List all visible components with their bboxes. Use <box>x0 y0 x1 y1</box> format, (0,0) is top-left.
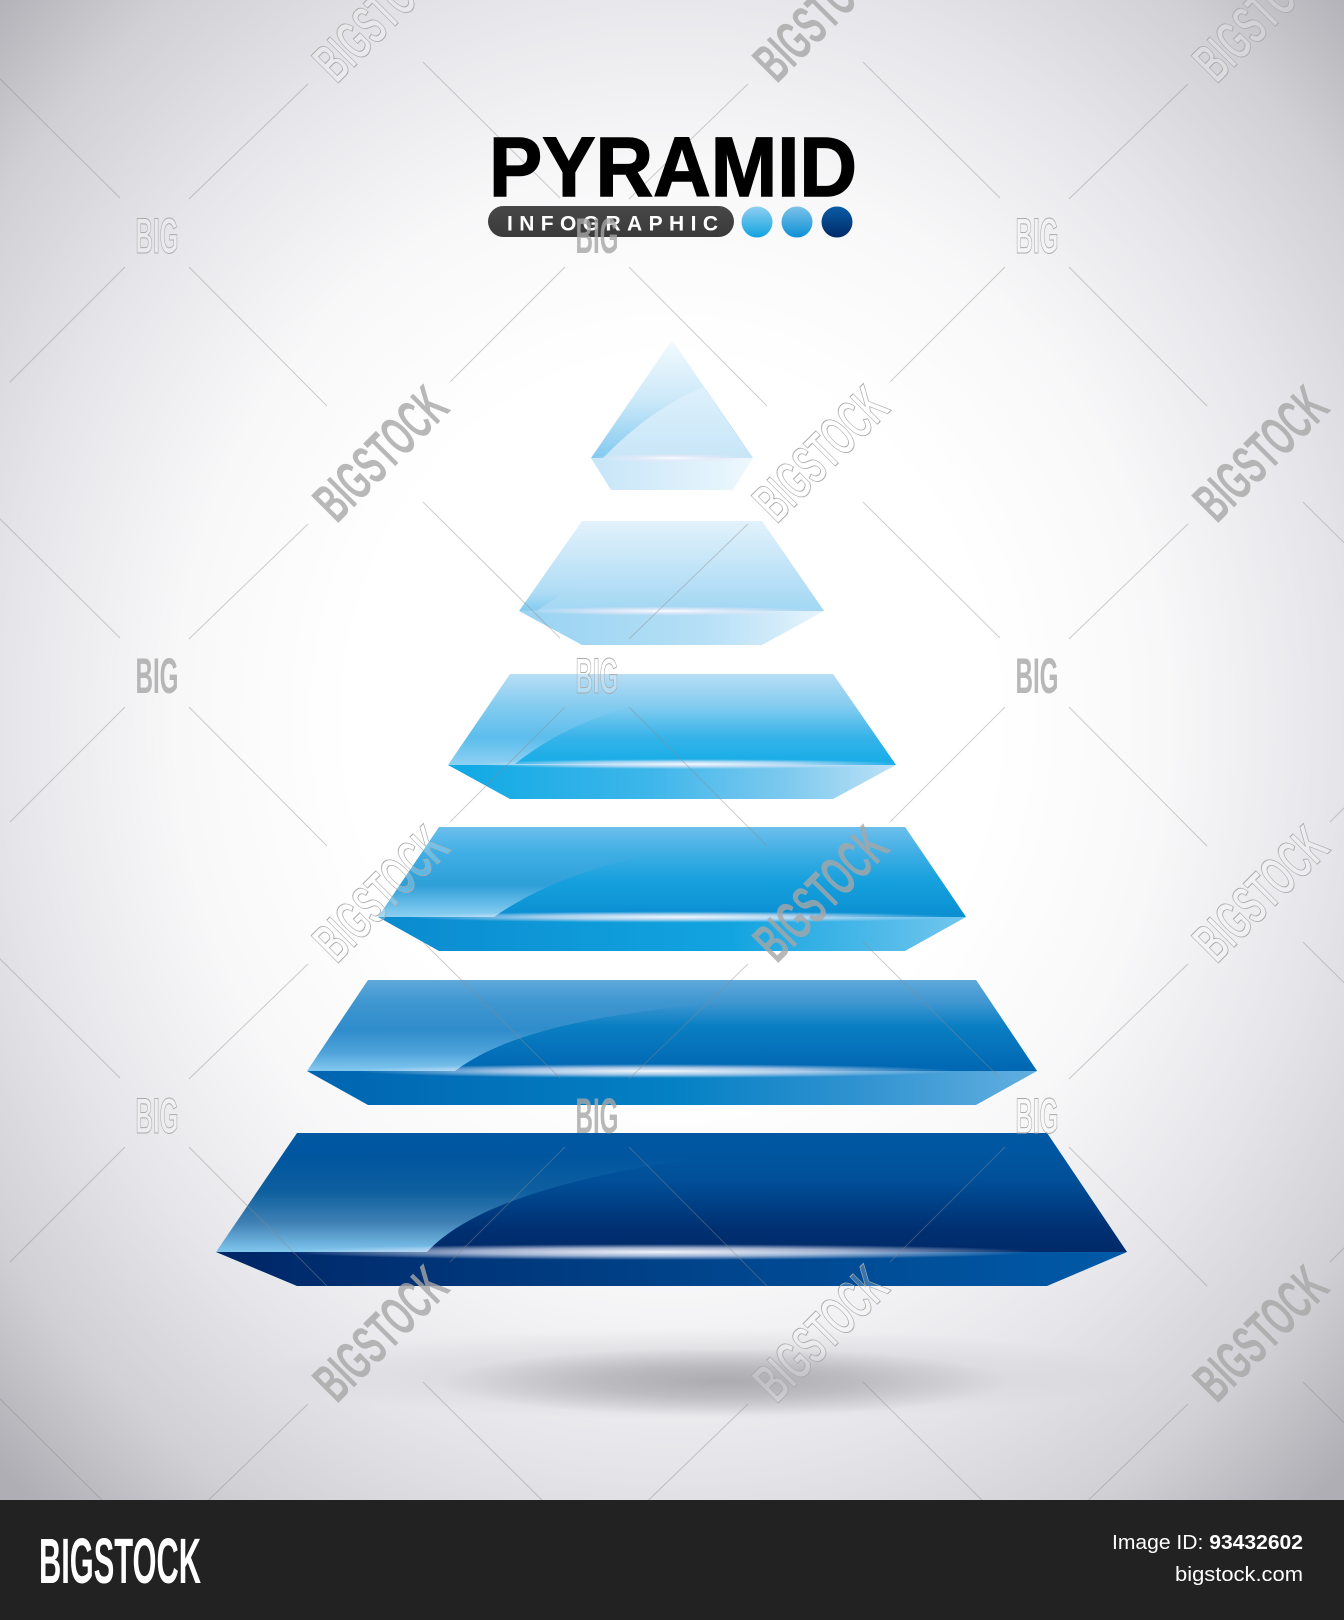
tier 4 <box>378 827 966 951</box>
watermark text: BIG <box>576 648 618 704</box>
watermark text: BIG <box>136 648 178 704</box>
watermark text: BIGSTOCK <box>741 814 900 973</box>
watermark text: BIGSTOCK <box>301 374 460 533</box>
tier 5 <box>307 980 1037 1105</box>
watermark text: BIGSTOCK <box>741 374 900 533</box>
watermark text: BIG <box>1016 208 1058 264</box>
watermark text: BIG <box>1016 1088 1058 1144</box>
floor shadow <box>265 1328 1145 1420</box>
watermark text: BIGSTOCK <box>741 1254 900 1413</box>
subtitle pill <box>488 206 734 237</box>
watermark text: BIG <box>136 1088 178 1144</box>
tier 2 <box>518 521 824 645</box>
tier 6: base <box>216 1133 1127 1286</box>
footer bar <box>0 1500 1344 1620</box>
watermark text: BIG <box>576 1088 618 1144</box>
heading: PYRAMID: PYRAMID <box>489 120 857 214</box>
tier 3 <box>448 674 905 799</box>
watermark text: BIGSTOCK <box>301 1254 460 1413</box>
icon: three dots <box>742 206 852 238</box>
footer bar: BIGSTOCK <box>39 1525 201 1597</box>
title <box>488 120 857 238</box>
image id: Image ID: 93432602 <box>1112 1532 1303 1554</box>
subtitle pill: INFOGRAPHIC <box>507 213 718 236</box>
watermark text <box>136 0 1340 1413</box>
watermark text: BIG <box>1016 648 1058 704</box>
watermark text: BIGSTOCK <box>301 814 460 973</box>
watermark text: BIG <box>136 208 178 264</box>
watermark text: BIG <box>576 208 618 264</box>
pyramid <box>216 340 1127 1286</box>
site url: bigstock.com <box>1175 1564 1303 1586</box>
tier 1: apex <box>591 340 753 490</box>
